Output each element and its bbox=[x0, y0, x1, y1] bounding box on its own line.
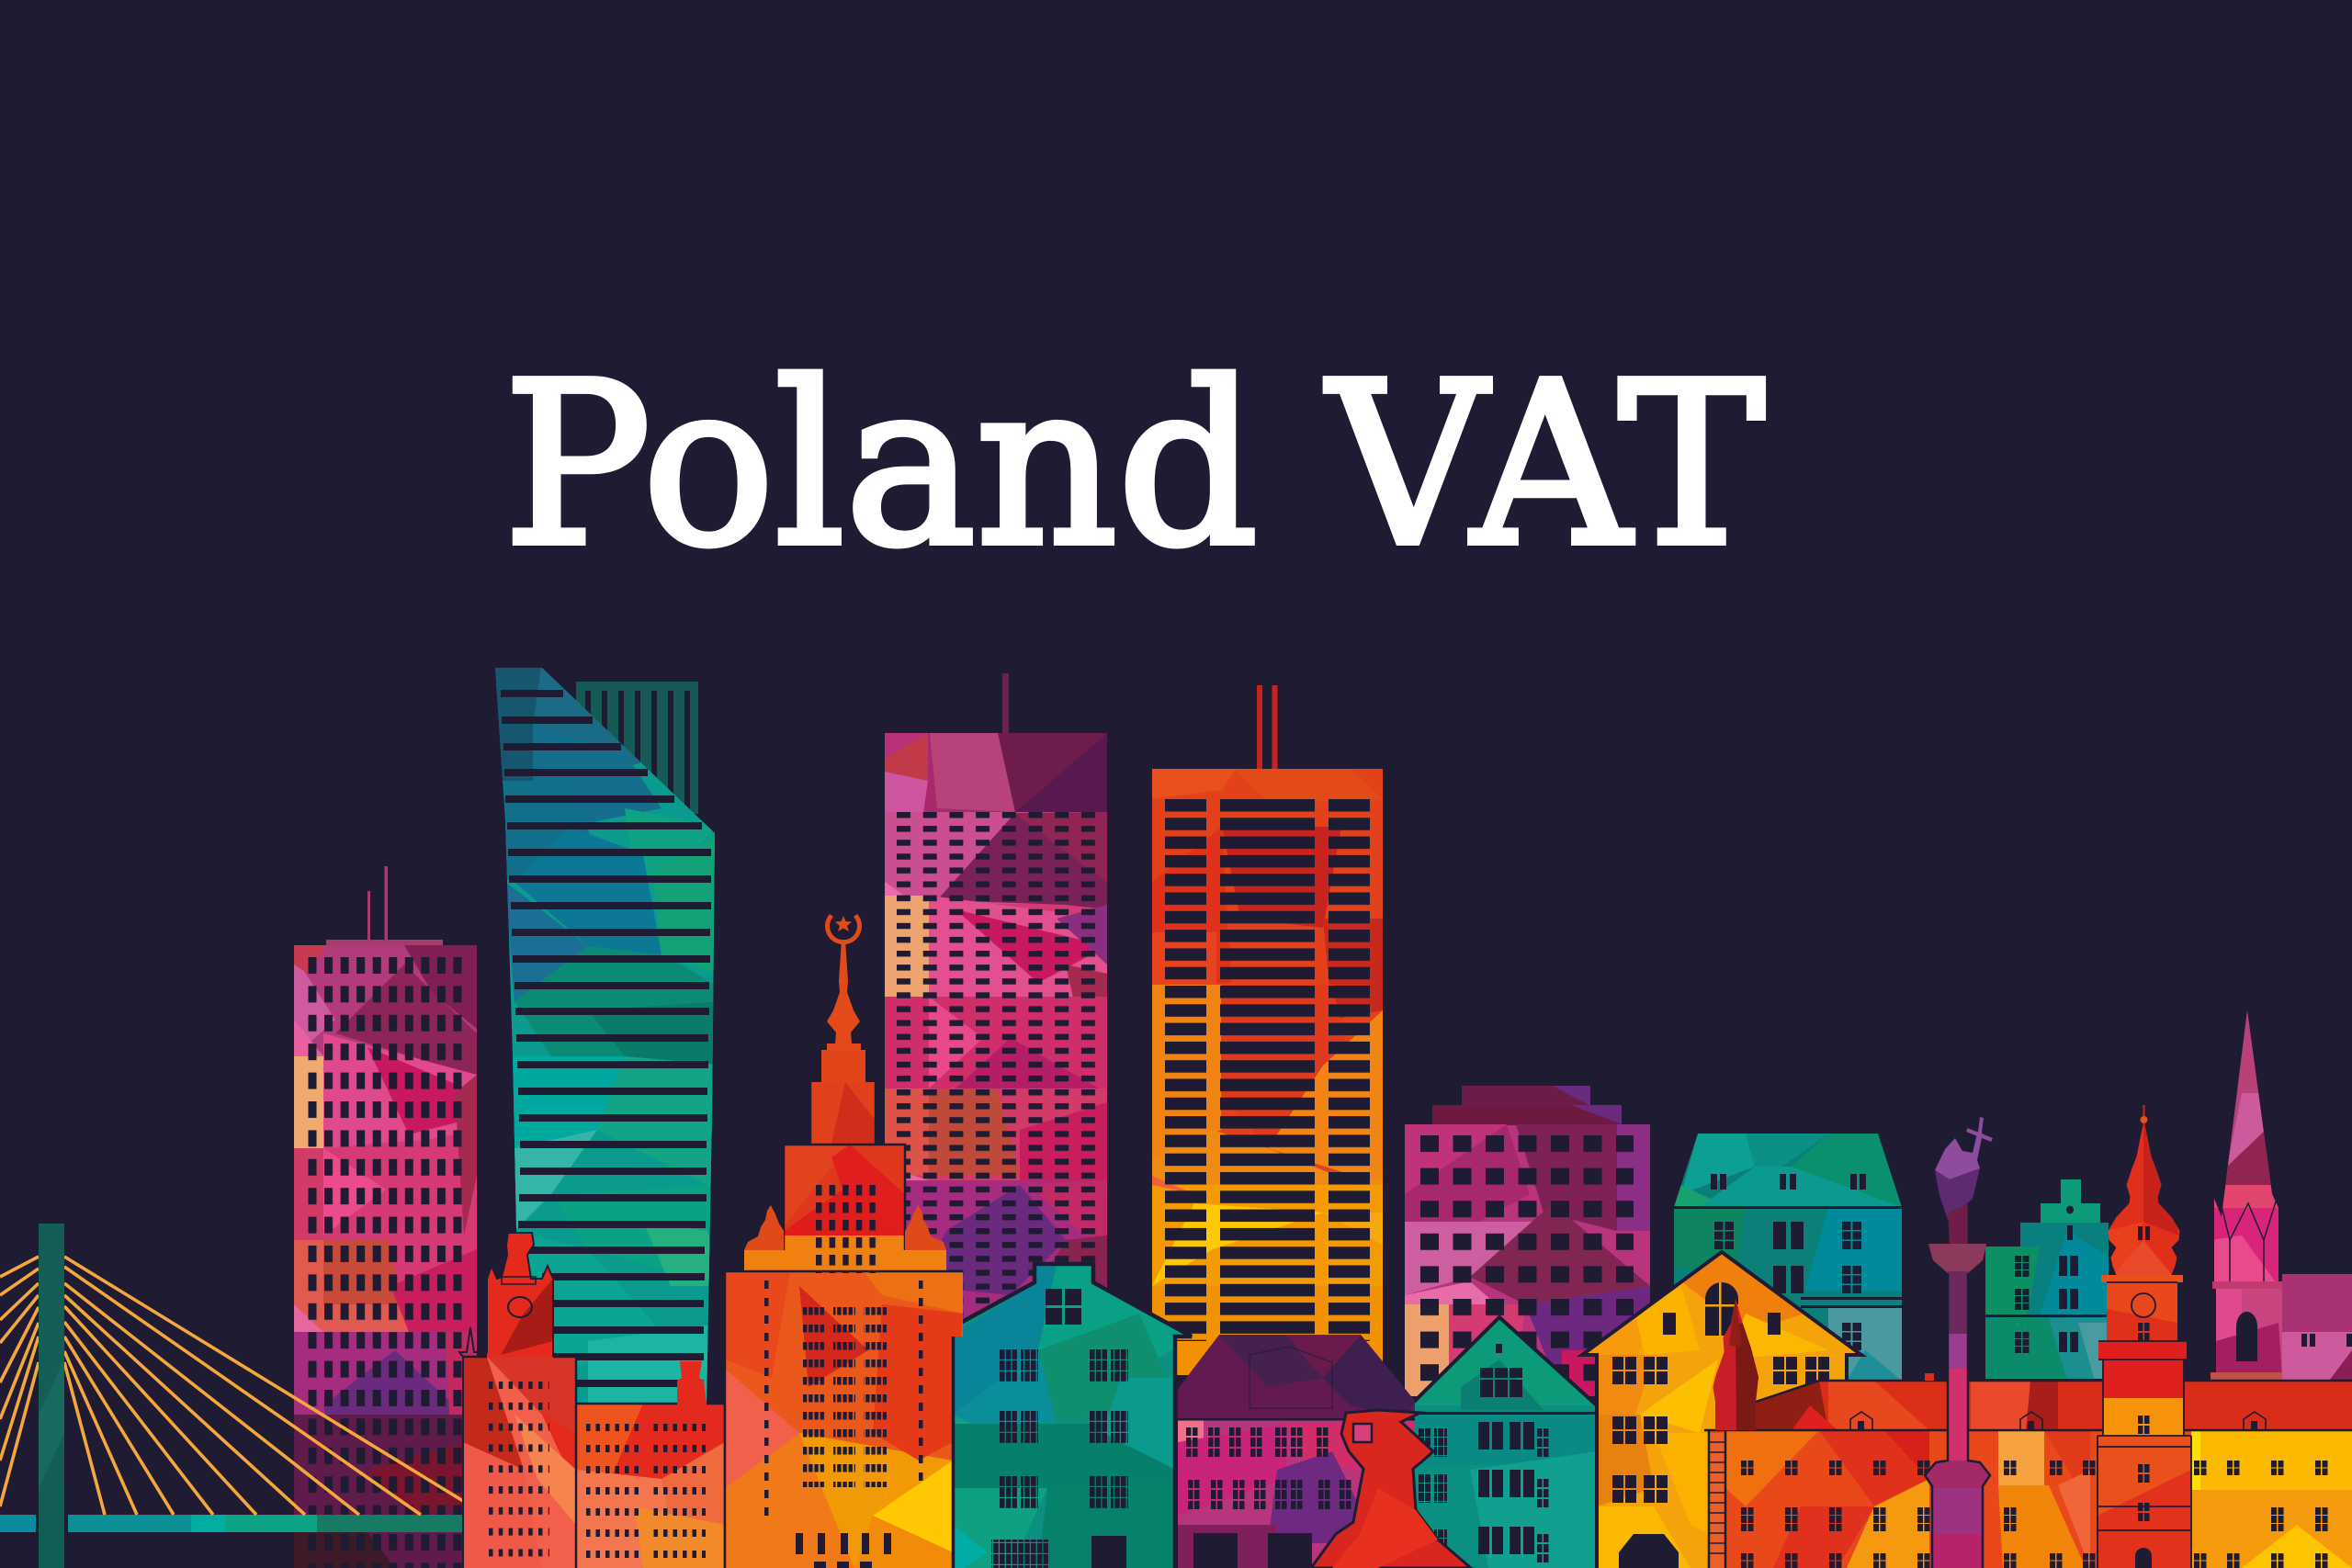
bridge cables bbox=[0, 1257, 463, 1515]
suspension bridge bbox=[0, 1224, 464, 1568]
palace spire with star and crescent bbox=[825, 914, 862, 1050]
dark green grid tower bbox=[576, 682, 698, 814]
red towered building bbox=[459, 1231, 730, 1568]
palace corner statues bbox=[744, 1205, 946, 1250]
large teal gabled house bbox=[1668, 1130, 1906, 1387]
clock tower bbox=[2095, 1102, 2196, 1568]
pink block building bbox=[1405, 1086, 1650, 1398]
bridge pylon bbox=[39, 1224, 64, 1568]
bridge deck bbox=[0, 1515, 464, 1532]
twisted teal tower bbox=[495, 668, 715, 1404]
mermaid statue bbox=[1311, 1410, 1471, 1568]
small red spire bbox=[1713, 1299, 1758, 1430]
title: Poland VAT bbox=[503, 334, 1765, 595]
pink tower with antennas bbox=[294, 866, 477, 1568]
yellow gabled house bbox=[1580, 1249, 1865, 1568]
small teal house behind mermaid bbox=[1406, 1314, 1599, 1568]
teal town house bbox=[933, 1264, 1194, 1568]
sigismund column bbox=[1920, 1117, 1994, 1568]
gothic church bbox=[2205, 1010, 2352, 1382]
dark roofed town house bbox=[1178, 1335, 1417, 1568]
long red roofed palace bbox=[1704, 1373, 2352, 1568]
palace of culture bbox=[721, 1047, 965, 1568]
stepped gable teal house bbox=[1984, 1179, 2109, 1382]
second pink tower bbox=[885, 673, 1107, 1323]
statue and cross bbox=[1935, 1117, 1993, 1244]
orange tower with twin antennas bbox=[1152, 685, 1383, 1375]
